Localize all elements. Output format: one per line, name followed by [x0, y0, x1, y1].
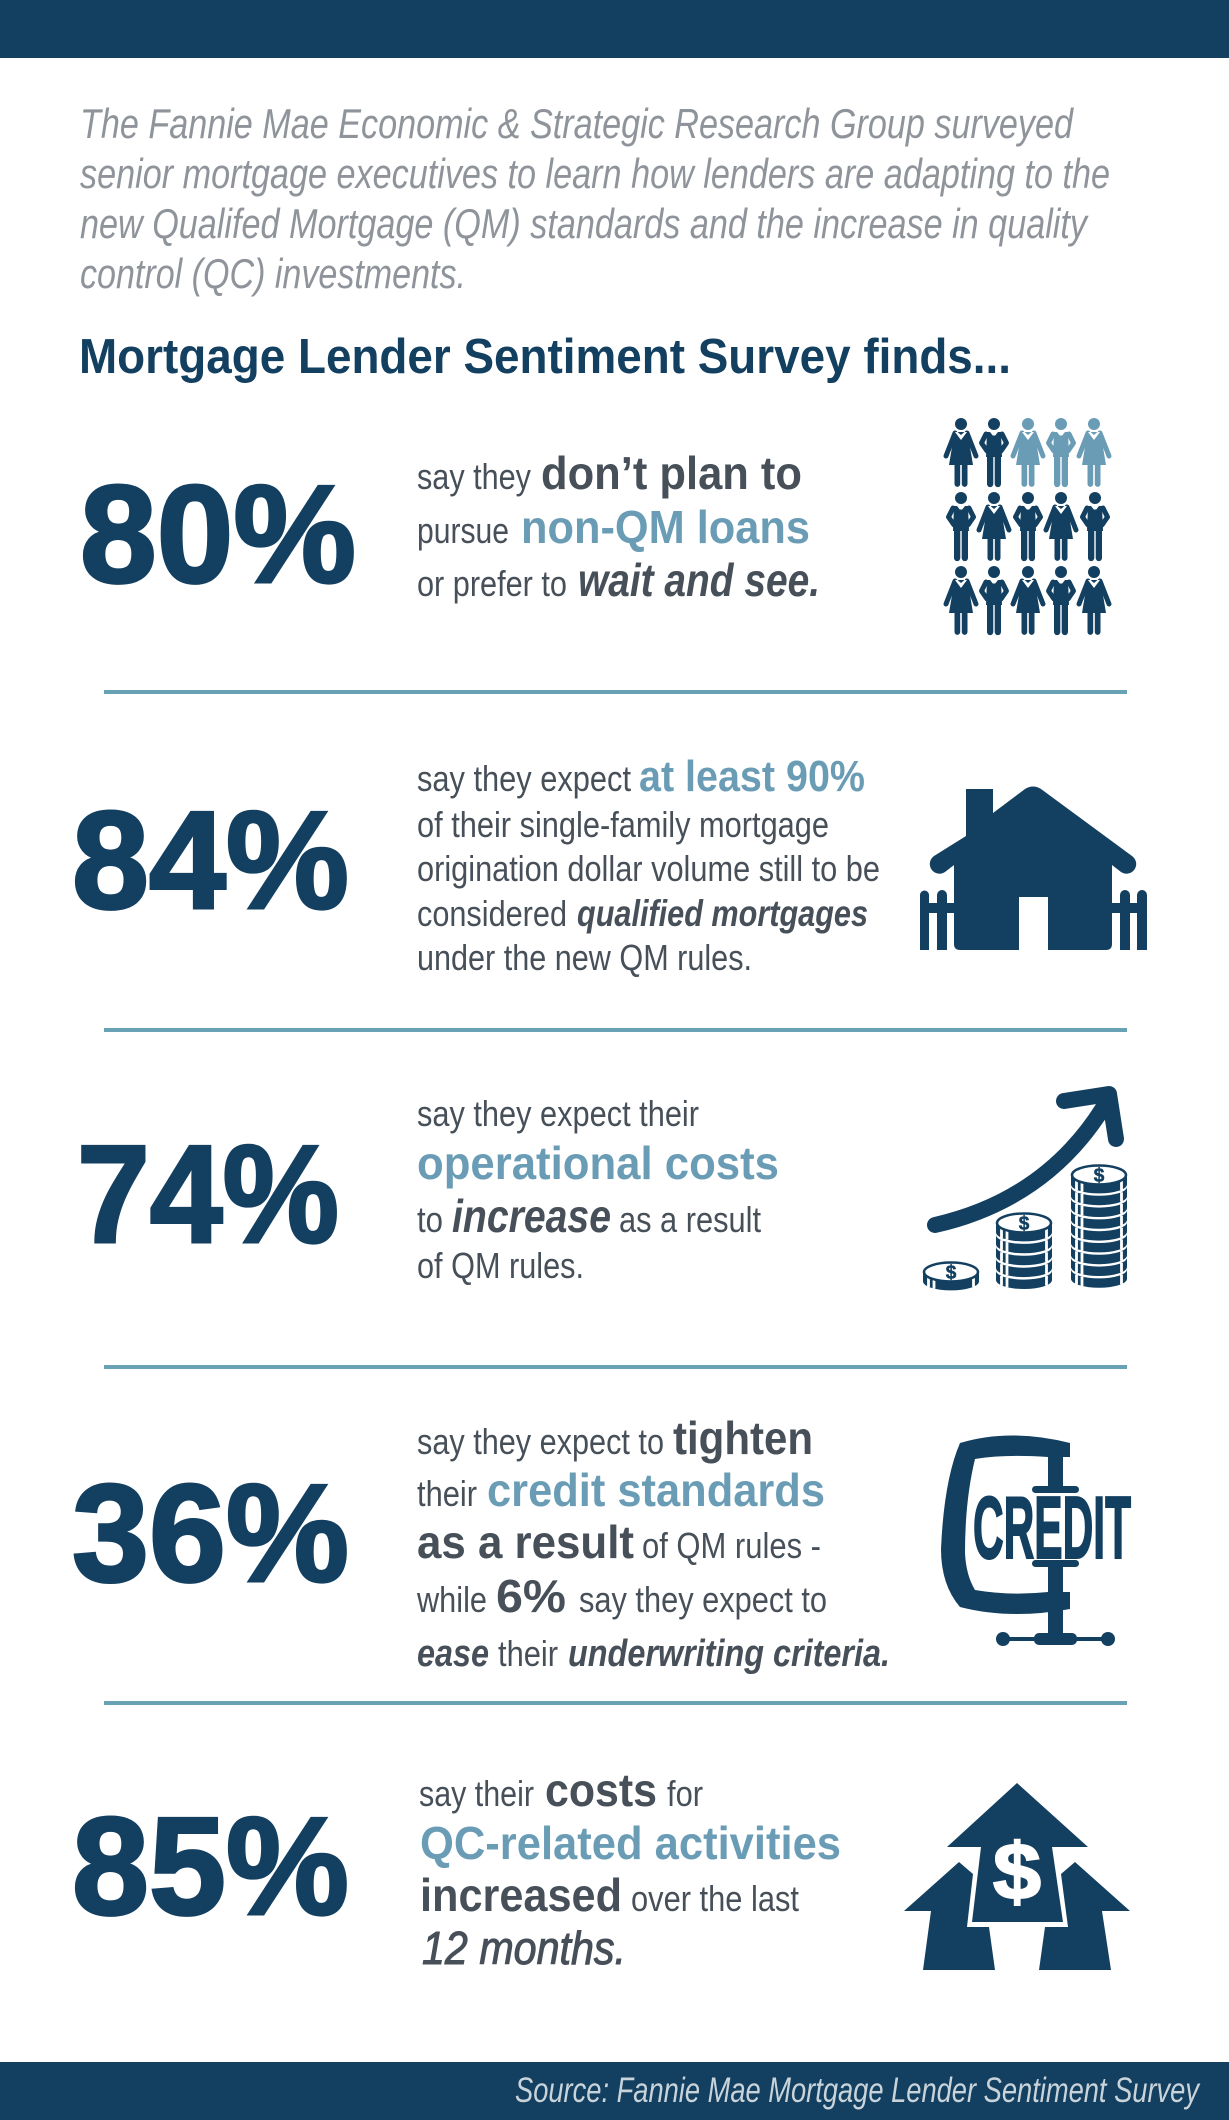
text: operational costs increase: operational costs: [417, 1137, 779, 1189]
panel: 84 percent: [72, 752, 1147, 978]
text: plan to pursue non-QM loans: don’t plan to: [541, 447, 802, 499]
icon: credit in a clamp: [941, 1436, 1131, 1646]
text: operational costs increase: increase: [452, 1190, 611, 1242]
text: tighten credit standards: say they expect to: [417, 1421, 664, 1462]
text: tighten credit standards: as a result: [417, 1516, 634, 1568]
text: operational costs increase: of QM rules.: [417, 1245, 584, 1286]
text: QC-related costs increased: for: [667, 1773, 703, 1814]
text: QC-related costs increased: [419, 1764, 841, 1974]
icon: house with fence: [920, 786, 1147, 950]
text: tighten credit standards: ease: [417, 1633, 489, 1675]
text: plan to pursue non-QM loans: pursue: [417, 510, 509, 551]
coin stack: tall: [1071, 1166, 1127, 1288]
panel: 80 percent: [80, 418, 1109, 635]
intro text: [80, 100, 1110, 297]
text: operational costs increase: to: [417, 1199, 443, 1240]
text: at least 90% qualified mortgages: of their single-family mortgage: [417, 804, 829, 845]
text: plan to pursue non-QM loans: [417, 447, 820, 606]
coin stack: tall: $: [1094, 1166, 1105, 1186]
icon: people grid: [946, 418, 1109, 635]
text: at least 90% qualified mortgages: at least 90%: [639, 752, 865, 801]
text: QC-related costs increased: increased: [420, 1869, 622, 1921]
stat: 74%: 74%: [77, 1117, 339, 1272]
text: tighten credit standards: while: [416, 1579, 487, 1620]
text: tighten credit standards: tighten: [673, 1412, 813, 1464]
text: at least 90% qualified mortgages: [417, 752, 880, 978]
icon: three up arrows with dollar sign: [904, 1783, 1130, 1970]
icon: three up arrows with dollar sign: $: [993, 1827, 1041, 1916]
text: at least 90% qualified mortgages: under the new QM rules.: [417, 937, 752, 978]
text: tighten credit standards: 6%: [496, 1570, 566, 1622]
text: tighten credit standards: credit standards: [487, 1464, 825, 1516]
text: QC-related costs increased: QC-related activities: [420, 1817, 841, 1869]
coin stack: medium: [996, 1214, 1052, 1289]
text: tighten credit standards: of QM rules -: [642, 1525, 821, 1566]
text: plan to pursue non-QM loans: or prefer to: [417, 563, 567, 604]
panel: 74 percent: [77, 1093, 1127, 1290]
stat: 84%: 84%: [72, 783, 349, 938]
panel: 85 percent: [72, 1764, 1130, 1974]
heading: Mortgage Lender Sentiment Survey finds...: [79, 330, 1011, 384]
text: plan to pursue non-QM loans: wait and see.: [578, 554, 820, 606]
text: at least 90% qualified mortgages: considered: [417, 893, 567, 934]
top bar: [0, 0, 1229, 58]
stat: 36%: 36%: [72, 1456, 349, 1611]
text: at least 90% qualified mortgages: say they expect: [417, 758, 631, 799]
stat: 85%: 85%: [72, 1789, 349, 1944]
text: tighten credit standards: say they expect to: [579, 1579, 827, 1620]
text: QC-related costs increased: say their: [419, 1773, 534, 1814]
text: at least 90% qualified mortgages: origination dollar volume still to be: [417, 848, 880, 889]
text: tighten credit standards: underwriting criteria.: [568, 1633, 890, 1675]
text: operational costs increase: say they expect their: [417, 1093, 699, 1134]
text: QC-related costs increased: over the last: [631, 1878, 799, 1919]
icon: rising arrow over coin stacks: [923, 1094, 1127, 1290]
coin stack: small: $: [946, 1262, 957, 1284]
text: tighten credit standards: [416, 1412, 890, 1675]
panel: 36 percent: [72, 1412, 1131, 1675]
footer bar: [0, 2062, 1229, 2120]
text: operational costs increase: as a result: [619, 1199, 761, 1240]
text: QC-related costs increased: 12 months.: [422, 1922, 626, 1974]
text: at least 90% qualified mortgages: qualified mortgages: [577, 893, 868, 934]
text: QC-related costs increased: costs: [545, 1764, 657, 1816]
coin stack: small: [923, 1262, 979, 1290]
text: plan to pursue non-QM loans: non-QM loans: [521, 501, 810, 553]
text: tighten credit standards: their: [417, 1473, 477, 1514]
coin stack: medium: $: [1019, 1214, 1030, 1234]
text: operational costs increase: [417, 1093, 779, 1286]
text: tighten credit standards: their: [498, 1633, 558, 1674]
text: plan to pursue non-QM loans: say they: [417, 456, 531, 497]
intro text: control (QC) investments.: [80, 250, 466, 297]
stat: 80%: 80%: [80, 457, 356, 612]
